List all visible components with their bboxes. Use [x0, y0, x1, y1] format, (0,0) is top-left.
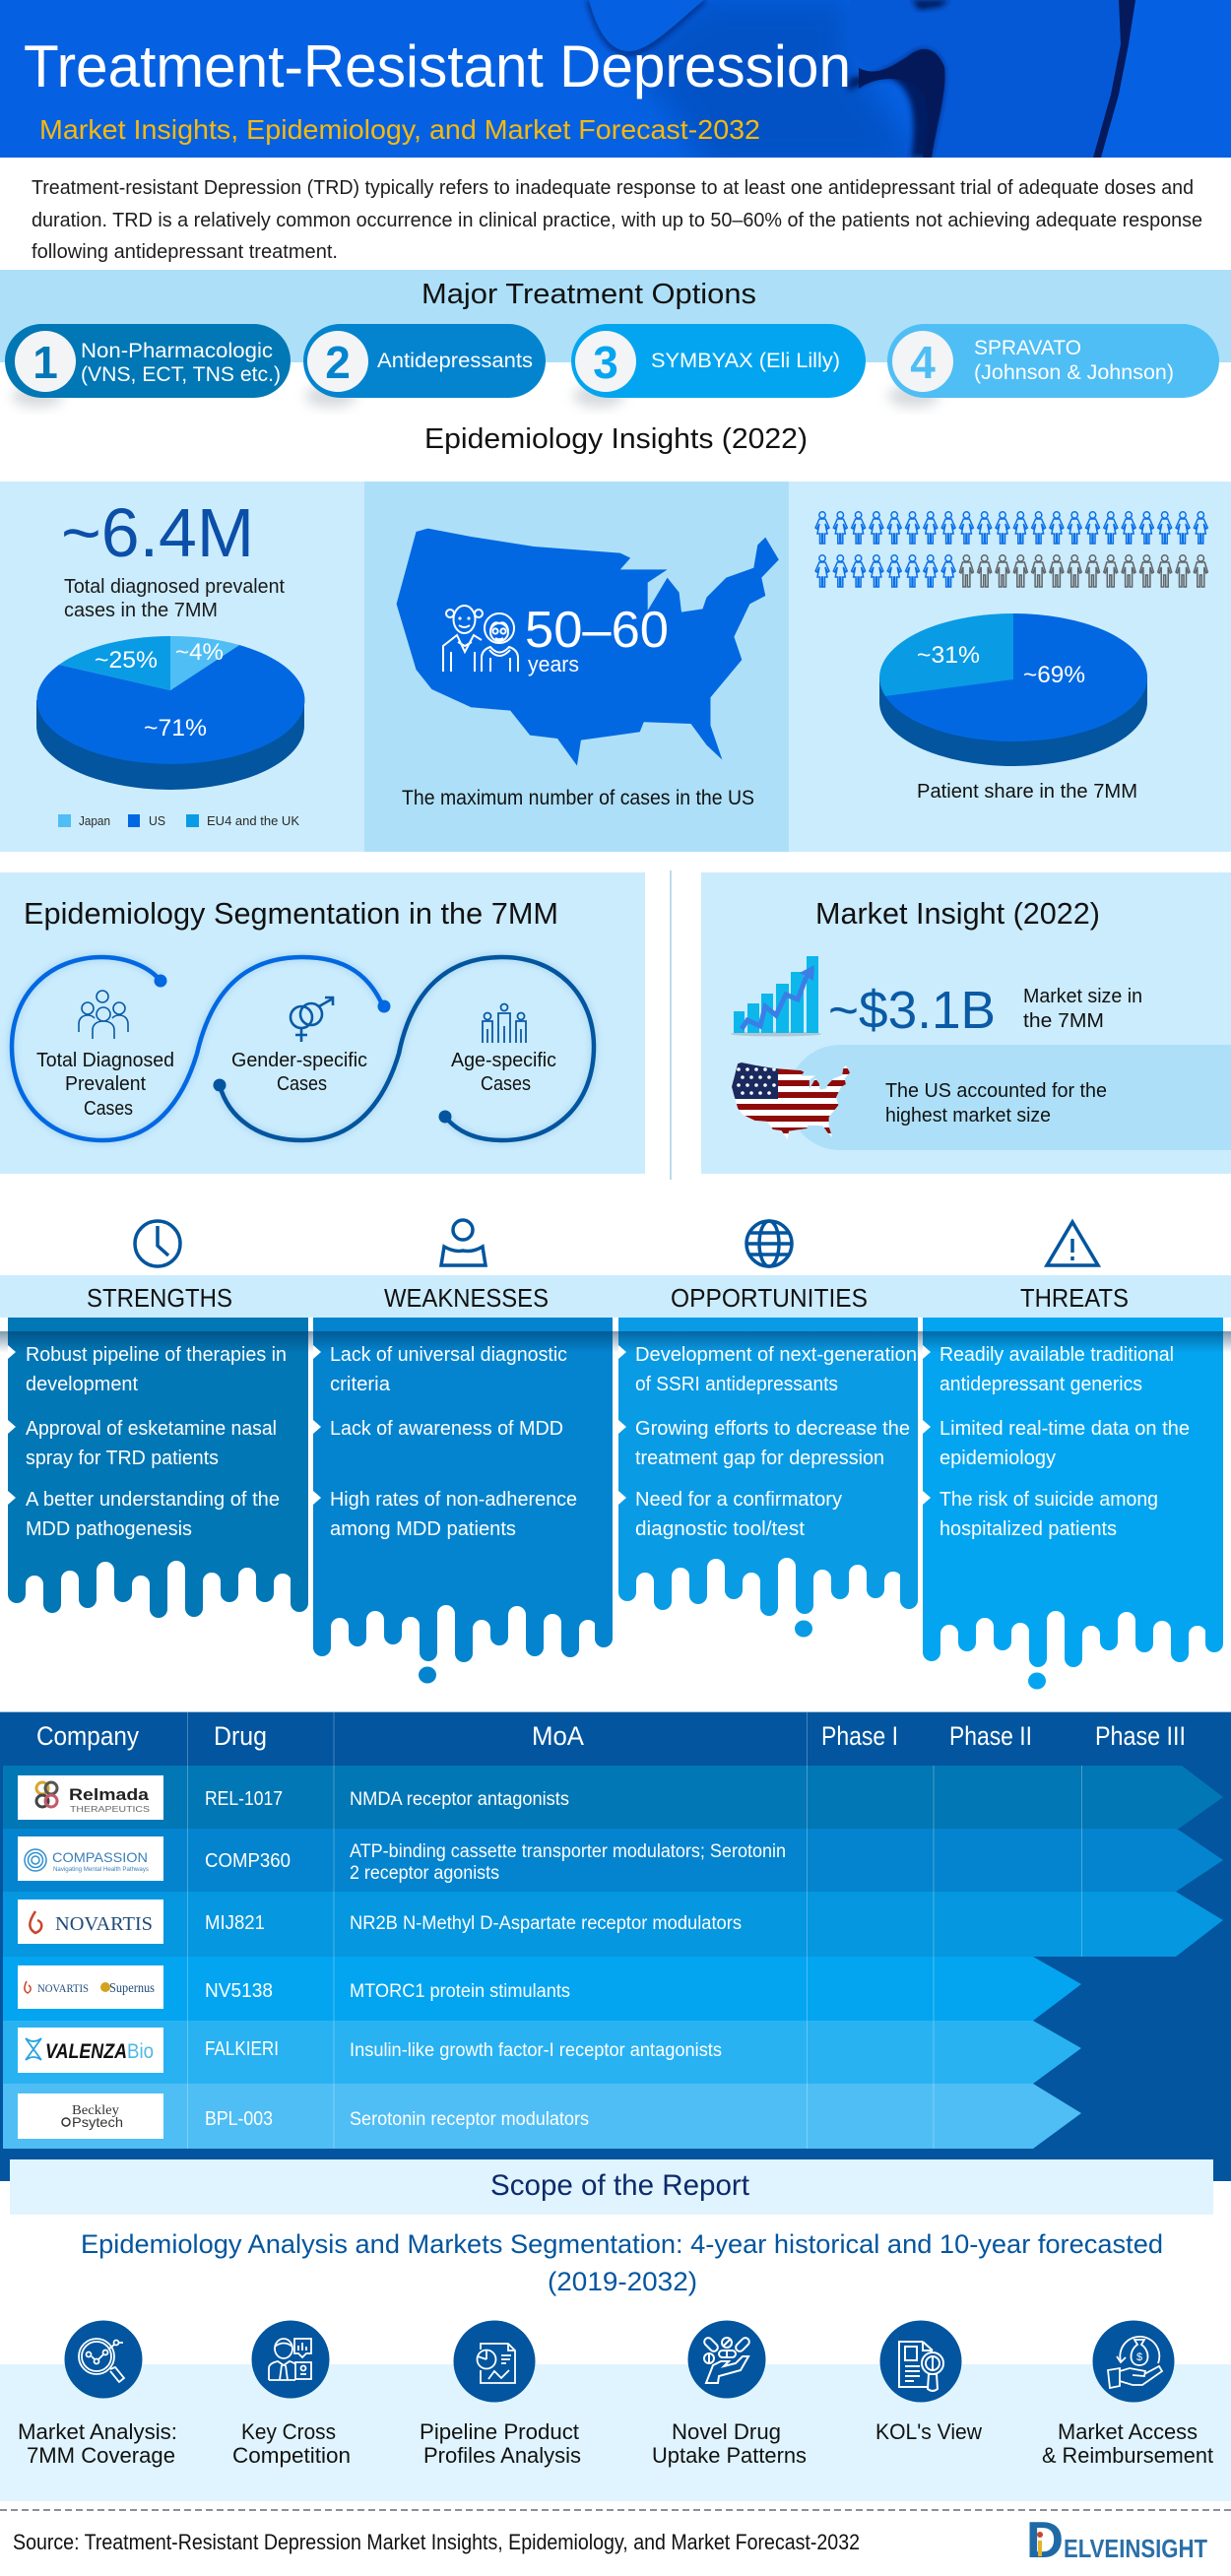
heading: weaknesses: WEAKNESSES [384, 1283, 549, 1313]
SWOT bullets: strengths: Robust pipeline of therapies in [26, 1344, 287, 1366]
label: gender-specific cases: Gender-specific [231, 1050, 367, 1071]
intro paragraph: duration. TRD is a relatively common occurrence in clinical practice, with up to 50–60% of the patients not achieving adequate response [32, 210, 1202, 231]
SWOT bullets: weaknesses: Lack of awareness of MDD [330, 1418, 563, 1440]
row: COMP360: COMPASSION [52, 1849, 148, 1865]
row: BPL-003: Beckley [72, 2103, 119, 2118]
heading: segmentation: Epidemiology Segmentation in the 7MM [24, 896, 558, 931]
callout: US highest market [732, 1045, 1231, 1150]
label: gender-specific cases [231, 1050, 367, 1095]
item: key cross competition: Key Cross [241, 2419, 336, 2444]
item: market analysis [18, 2320, 177, 2468]
table header row: MoA [532, 1721, 584, 1751]
item: market access [1042, 2320, 1213, 2468]
table header row: Phase II [949, 1721, 1032, 1751]
item: KOL's view: KOL's View [875, 2419, 982, 2444]
stat: 6.4M: ~6.4M [61, 494, 254, 571]
row: REL-1017 [3, 1766, 1223, 1829]
panel: patient share [789, 482, 1231, 852]
row: REL-1017: NMDA receptor antagonists [350, 1789, 569, 1810]
logo: DelveInsight [1026, 2512, 1207, 2569]
logo: DelveInsight: D [1026, 2512, 1064, 2569]
curve: blue loop [12, 957, 390, 1140]
item: market access: Market Access [1058, 2419, 1198, 2444]
icon: group of people [79, 991, 128, 1039]
row: NV5138: MTORC1 protein stimulants [350, 1981, 570, 2002]
option 1: Non-Pharmacologic [81, 340, 273, 362]
panel: threats column [923, 1318, 1223, 1690]
SWOT bullets: weaknesses [313, 1344, 577, 1540]
scope subtitle [81, 2229, 1163, 2296]
heading: opportunities: OPPORTUNITIES [671, 1283, 868, 1313]
SWOT bullets: strengths: development [26, 1374, 138, 1395]
row: MIJ821: NR2B N-Methyl D-Aspartate receptor modulators [350, 1913, 742, 1934]
table header row: Phase I [821, 1721, 898, 1751]
row: BPL-003 [3, 2084, 1081, 2149]
pipeline table [0, 1711, 1231, 2181]
label: total diagnosed prevalent cases: Prevalent [65, 1073, 146, 1095]
SWOT bullets: opportunities: Growing efforts to decrease the [635, 1418, 910, 1440]
label: market size [1023, 986, 1142, 1032]
pie chart: patient share: ~31% [917, 642, 980, 669]
option 4: SPRAVATO [974, 337, 1081, 359]
item: market access: & Reimbursement [1042, 2443, 1213, 2468]
row: NV5138: NOVARTIS [37, 1981, 89, 1995]
SWOT bullets: strengths [8, 1344, 287, 1540]
row: COMP360 [3, 1829, 1223, 1892]
scope subtitle: (2019-2032) [548, 2267, 697, 2296]
SWOT bullets: opportunities [618, 1344, 917, 1540]
label: total diagnosed: Total diagnosed prevalent [64, 576, 285, 598]
SWOT bullets: threats: The risk of suicide among [939, 1489, 1158, 1511]
SWOT bullets: strengths: MDD pathogenesis [26, 1518, 192, 1540]
row: FALKIERI: Bio [127, 2040, 154, 2063]
icon: globe [746, 1221, 792, 1266]
item: pipeline product profiles: Profiles Analysis [423, 2443, 581, 2468]
intro paragraph: Treatment-resistant Depression (TRD) typically refers to inadequate response to at least one antidepressant trial of adequate doses and [32, 177, 1194, 199]
row: FALKIERI [3, 2021, 1081, 2084]
panel: US map age group [364, 482, 789, 852]
SWOT bullets: weaknesses: criteria [330, 1374, 391, 1395]
pictogram: people row one [815, 512, 1207, 544]
scope subtitle: Epidemiology Analysis and Markets Segmentation: 4-year historical and 10-year forecasted [81, 2229, 1163, 2259]
panel: strengths column [8, 1318, 308, 1615]
SWOT bullets: strengths: Approval of esketamine nasal [26, 1418, 277, 1440]
option 1: (VNS, ECT, TNS etc.) [81, 363, 281, 386]
label: total diagnosed prevalent cases: Total Diagnosed [36, 1050, 174, 1071]
item: pipeline product profiles [420, 2320, 581, 2468]
SWOT bullets: threats: Limited real-time data on the [939, 1418, 1190, 1440]
SWOT bullets: threats: hospitalized patients [939, 1518, 1117, 1540]
row: COMP360: COMP360 [205, 1850, 291, 1872]
SWOT bullets: opportunities: treatment gap for depression [635, 1448, 884, 1469]
pie chart: cases by region: ~25% [95, 647, 158, 674]
row: MIJ821: MIJ821 [205, 1912, 265, 1934]
row: REL-1017: THERAPEUTICS [70, 1805, 150, 1814]
option 1: 1 [32, 337, 58, 388]
label: total diagnosed [64, 576, 285, 621]
caption: maximum cases: The maximum number of cases in the US [402, 787, 754, 809]
option 2: 2 [325, 337, 351, 388]
SWOT bullets: opportunities: Need for a confirmatory [635, 1489, 842, 1511]
option 1 [5, 324, 291, 408]
table header row: Drug [214, 1721, 267, 1751]
heading: threats: THREATS [1020, 1283, 1129, 1313]
item: key cross competition [232, 2320, 351, 2468]
option 2: Antidepressants [377, 350, 533, 372]
SWOT bullets: threats: antidepressant generics [939, 1374, 1142, 1395]
legend: US [149, 813, 165, 828]
icon: gender symbols [291, 998, 333, 1042]
icon: rising bar chart [731, 956, 821, 1036]
source note: Source: Treatment-Resistant Depression Market Insights, Epidemiology, and Market Forecast-2032 [13, 2530, 860, 2554]
pie chart: patient share: ~69% [1023, 662, 1085, 688]
text: US accounted [885, 1080, 1107, 1127]
legend: EU4 and the UK [207, 813, 299, 828]
pie chart: patient share [879, 613, 1147, 766]
row: MIJ821 [3, 1892, 1223, 1957]
pie chart: cases by region [36, 636, 304, 790]
item: novel drug uptake: Uptake Patterns [652, 2443, 807, 2468]
option 2 [303, 324, 546, 408]
map: United States [397, 529, 779, 766]
SWOT bullets: strengths: A better understanding of the [26, 1489, 280, 1511]
panel: market insight [701, 872, 1231, 1174]
item: novel drug uptake [652, 2320, 807, 2468]
SWOT bullets: weaknesses: High rates of non-adherence [330, 1489, 577, 1511]
icon: family [483, 1004, 526, 1043]
icon: person on map [441, 1220, 486, 1265]
row: BPL-003: Psytech [72, 2114, 123, 2130]
label: gender-specific cases: Cases [277, 1073, 327, 1095]
option 4: (Johnson & Johnson) [974, 361, 1174, 384]
heading: scope of the report: Scope of the Report [490, 2169, 750, 2202]
panel: scope items [0, 2320, 1231, 2501]
text: US accounted: The US accounted for the [885, 1080, 1107, 1102]
option 4 [887, 324, 1219, 408]
label: age-specific cases: Cases [481, 1073, 531, 1095]
SWOT bullets: threats [923, 1344, 1190, 1540]
icon: clock [135, 1221, 180, 1266]
pictogram: people row two [815, 555, 1207, 587]
label: market size: the 7MM [1023, 1010, 1104, 1032]
SWOT bullets: strengths: spray for TRD patients [26, 1448, 219, 1469]
table header row: Company [36, 1721, 139, 1751]
item: market analysis: 7MM Coverage [27, 2443, 175, 2468]
SWOT bullets: threats: Readily available traditional [939, 1344, 1174, 1366]
row: NV5138 [3, 1957, 1081, 2021]
panel: major treatment options [0, 270, 1231, 408]
item: KOL's view [875, 2320, 982, 2444]
SWOT bullets: weaknesses: Lack of universal diagnostic [330, 1344, 567, 1366]
icon: warning triangle [1047, 1222, 1098, 1265]
row: FALKIERI: Insulin-like growth factor-I receptor antagonists [350, 2040, 722, 2061]
pie chart: cases by region: ~4% [175, 639, 224, 666]
heading: major treatment options: Major Treatment Options [421, 279, 756, 310]
label: total diagnosed: cases in the 7MM [64, 600, 218, 621]
label: age-specific cases [451, 1050, 556, 1095]
caption: patient share: Patient share in the 7MM [917, 781, 1137, 803]
option 3: 3 [593, 337, 618, 388]
SWOT bullets: weaknesses: among MDD patients [330, 1518, 516, 1540]
option 3: SYMBYAX (Eli Lilly) [651, 350, 840, 372]
table header row [36, 1721, 1186, 1751]
pie chart: cases by region: ~71% [144, 715, 207, 741]
intro paragraph [32, 177, 1202, 263]
row: COMP360: Navigating Mental Health Pathways [53, 1867, 149, 1873]
panel: opportunities column [618, 1318, 918, 1637]
item: market analysis: Market Analysis: [18, 2419, 177, 2444]
item: novel drug uptake: Novel Drug [672, 2419, 781, 2444]
SWOT bullets: opportunities: of SSRI antidepressants [635, 1374, 838, 1395]
panel: US map age group: years [528, 652, 579, 676]
heading: strengths: STRENGTHS [87, 1283, 232, 1313]
row: FALKIERI: FALKIERI [205, 2038, 279, 2060]
panel: total diagnosed prevalent cases [0, 482, 364, 852]
row: NV5138: Supernus [109, 1981, 155, 1996]
SWOT bullets: opportunities: Development of next-generation [635, 1344, 917, 1366]
row: BPL-003: Serotonin receptor modulators [350, 2109, 589, 2130]
item: pipeline product profiles: Pipeline Product [420, 2419, 579, 2444]
intro paragraph: following antidepressant treatment. [32, 241, 338, 263]
text: US accounted: highest market size [885, 1105, 1051, 1127]
icon: elderly couple [443, 606, 518, 672]
row: REL-1017: REL-1017 [205, 1788, 283, 1810]
stat: 50-60 years: 50–60 [525, 602, 669, 659]
label: market size: Market size in [1023, 986, 1142, 1007]
table header row: Phase III [1095, 1721, 1186, 1751]
legend [58, 813, 299, 828]
header banner [0, 0, 1231, 167]
panel: weaknesses column [313, 1318, 613, 1684]
SWOT bullets: threats: epidemiology [939, 1448, 1056, 1469]
row: NV5138: NV5138 [205, 1980, 273, 2002]
row: REL-1017: Relmada [69, 1785, 150, 1804]
row: FALKIERI: VALENZA [45, 2040, 127, 2063]
panel: scope heading band [10, 2159, 1213, 2215]
logo: DelveInsight: ELVEINSIGHT [1064, 2534, 1207, 2563]
SWOT bullets: opportunities: diagnostic tool/test [635, 1518, 805, 1540]
icon: US flag map [732, 1063, 852, 1141]
heading: market insight: Market Insight (2022) [815, 896, 1100, 931]
item: market access: $ [1136, 2351, 1142, 2363]
heading: epidemiology insights: Epidemiology Insights (2022) [424, 423, 808, 455]
row: COMP360: ATP-binding cassette transporter modulators; Serotonin [350, 1841, 786, 1862]
label: age-specific cases: Age-specific [451, 1050, 556, 1071]
option 3 [571, 324, 866, 408]
title: Treatment-Resistant Depression [24, 33, 851, 99]
row: MIJ821: NOVARTIS [55, 1913, 153, 1935]
panel: epidemiology segmentation [0, 872, 645, 1174]
row: BPL-003: BPL-003 [205, 2108, 273, 2130]
legend: Japan [79, 813, 110, 828]
row: COMP360: 2 receptor agonists [350, 1863, 499, 1884]
option 4: 4 [910, 337, 936, 388]
label: total diagnosed prevalent cases: Cases [84, 1098, 133, 1120]
panel: SWOT header band [0, 1275, 1231, 1318]
subtitle: Market Insights, Epidemiology, and Market Forecast-2032 [39, 114, 760, 145]
curve: dark loop [213, 957, 594, 1140]
stat: market size: ~$3.1B [828, 981, 996, 1040]
item: key cross competition: Competition [232, 2443, 351, 2468]
label: total diagnosed prevalent cases [36, 1050, 174, 1120]
